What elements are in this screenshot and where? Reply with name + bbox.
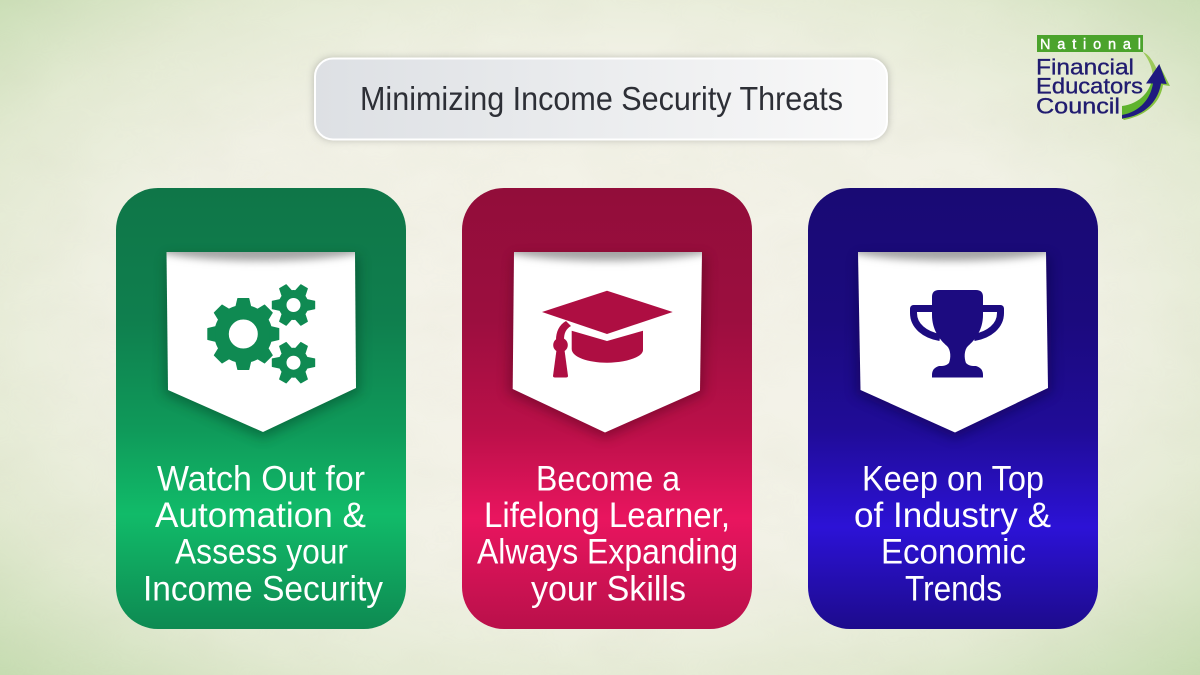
ribbon [160,252,364,442]
card text: Trends [905,570,1002,608]
card text: Watch Out for [157,460,365,498]
logo: National Financial Educators Council [1036,35,1170,120]
card text: Become a [536,460,680,498]
panel: automation [116,188,406,629]
ribbon [503,252,710,442]
logo: National Financial Educators Council: Financial [1036,54,1134,80]
card text: Always Expanding [477,532,738,572]
title text: Minimizing Income Security Threats [360,81,843,118]
panel: lifelong learning [462,188,752,629]
logo: National Financial Educators Council: Council [1036,94,1120,118]
card text: Automation & [155,496,366,535]
card text: Keep on Top [862,460,1044,498]
icon: gears [208,284,315,384]
title banner [314,58,888,140]
logo: National Financial Educators Council: Educators [1036,74,1143,98]
card text: of Industry & [854,496,1051,535]
card text: Income Security [143,570,383,608]
card text: your Skills [531,570,686,608]
icon: trophy [914,290,1000,378]
ribbon [852,252,1056,442]
panel: industry trends [808,188,1098,629]
card text [143,460,383,608]
card text: Lifelong Learner, [484,496,730,535]
card text [477,460,738,608]
logo: National Financial Educators Council: National [1040,37,1141,53]
card text [854,460,1051,608]
icon: graduation cap [542,291,673,378]
card text: Economic [881,532,1026,572]
card text: Assess your [175,532,348,572]
